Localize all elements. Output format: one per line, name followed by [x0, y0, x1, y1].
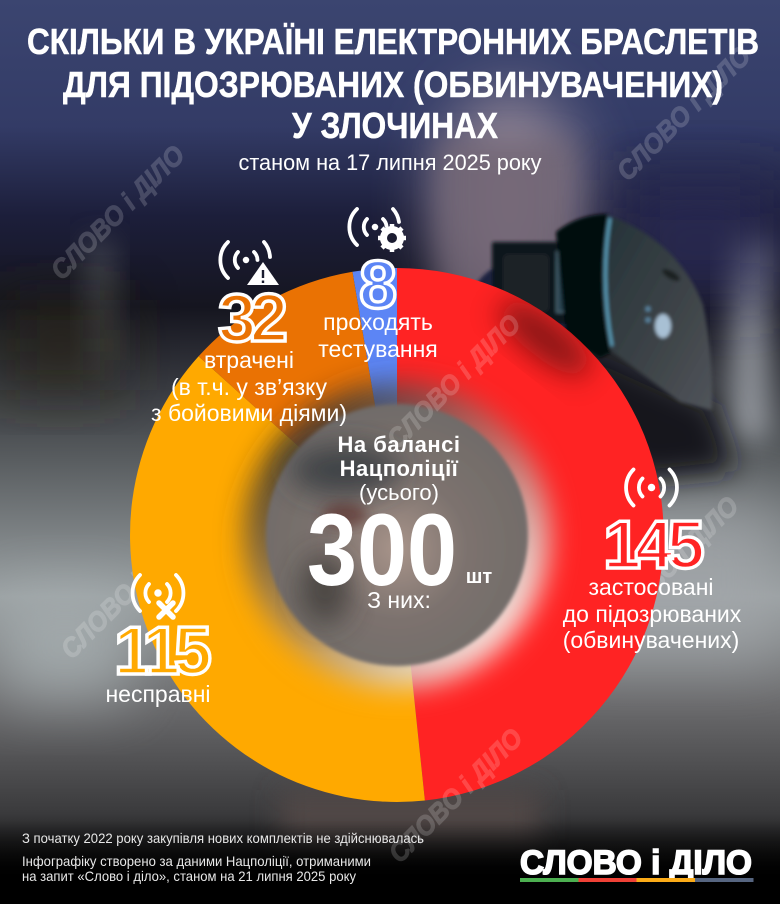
watermarks over chart: [381, 309, 528, 868]
icon: signal gear: [349, 209, 406, 252]
label: несправні: [105, 681, 211, 707]
slice: 8 testing: [352, 268, 397, 535]
label: (обвинувачених): [563, 627, 739, 653]
group: 8 testing: [318, 209, 438, 362]
number 115: 115: [114, 613, 210, 689]
watermarks: СЛОВО і ДІЛО: [45, 140, 190, 285]
total 300: 300: [307, 493, 457, 607]
icon: broken signal: [133, 575, 183, 617]
centre circle: [266, 404, 528, 666]
watermarks: СЛОВО і ДІЛО: [55, 519, 200, 664]
donut chart: [130, 268, 664, 802]
number 32: 32: [218, 280, 286, 356]
centre label: З них:: [367, 587, 431, 613]
watermarks over chart: СЛОВО і ДІЛО: [383, 723, 528, 868]
footnote: З початку 2022 року закупівля нових комплектів не здійснювалась: [22, 830, 424, 846]
icon: active signal: [626, 470, 677, 506]
label: [318, 309, 438, 362]
watermarks over chart: СЛОВО і ДІЛО: [381, 309, 526, 454]
slice: 115 faulty: [130, 356, 425, 802]
icon: signal warning: [220, 242, 279, 285]
label: тестування: [318, 336, 438, 362]
watermarks: СЛОВО і ДІЛО: [611, 41, 756, 186]
centre label: Нацполіції: [340, 456, 459, 481]
slice: 32 lost: [199, 272, 397, 535]
subtitle: станом на 17 липня 2025 року: [238, 150, 542, 175]
label: застосовані: [588, 574, 714, 600]
group: 145 applied: [563, 470, 742, 653]
centre label: (усього): [359, 480, 439, 505]
label: з бойовими діями): [151, 400, 347, 426]
group: 115 faulty: [105, 575, 211, 707]
label: [151, 347, 347, 426]
logo: СЛОВО і ДІЛО: [520, 844, 752, 882]
watermarks: [45, 41, 756, 664]
title: У ЗЛОЧИНАХ: [292, 105, 498, 146]
source note: на запит «Слово і діло», станом на 21 липня 2025 року: [22, 868, 356, 884]
label: [563, 574, 742, 653]
number 8: 8: [359, 247, 397, 323]
centre label: [307, 432, 492, 613]
number 145: 145: [603, 507, 703, 583]
unit: шт: [466, 566, 492, 588]
label: проходять: [323, 309, 433, 335]
label: до підозрюваних: [563, 601, 742, 627]
photo: electronic bracelet: [470, 214, 735, 480]
watermarks: СЛОВО і ДІЛО: [599, 491, 744, 636]
group: 32 lost: [151, 242, 347, 426]
label: (в т.ч. у зв’язку: [171, 374, 327, 400]
photo show-through on ring: [245, 288, 601, 687]
label: втрачені: [204, 347, 294, 373]
centre label: На балансі: [338, 432, 460, 457]
source note: Інфографіку створено за даними Нацполіції, отриманими: [22, 853, 371, 869]
source note: [22, 853, 371, 884]
title: [27, 21, 759, 146]
slice: 145 applied: [397, 268, 664, 800]
